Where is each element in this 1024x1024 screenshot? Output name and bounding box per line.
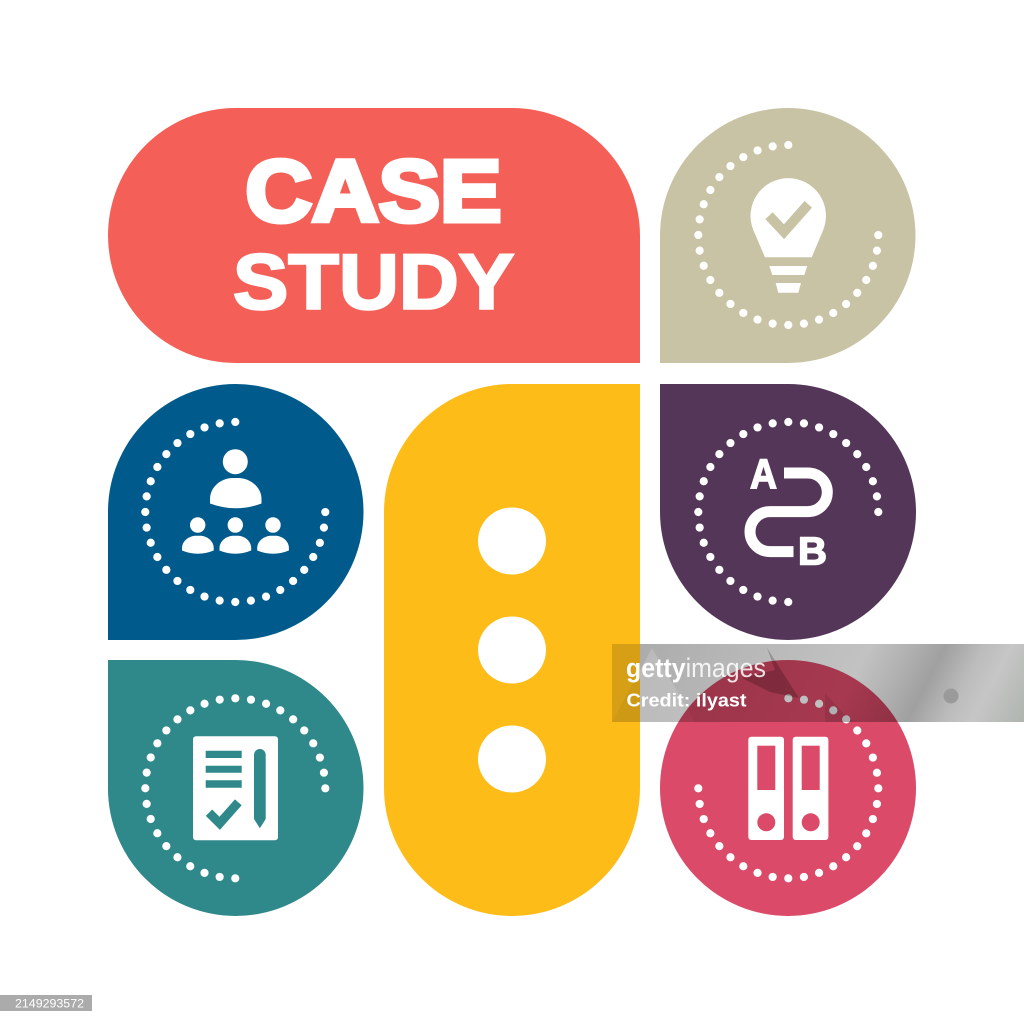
watermark band [612,644,1024,722]
heading: case: CASE [246,143,502,240]
icon: a to b path [750,450,827,573]
panel: idea lamp [660,108,916,363]
panel: document [108,660,364,916]
icon: a to b path: B [798,530,827,573]
icon: light bulb with check [751,178,826,293]
panel: route [660,384,916,640]
dotted ring: binders [698,698,878,878]
icon: team hierarchy [182,449,289,554]
watermark credit: Credit: ilyast [626,690,746,711]
panel: title [108,108,640,363]
image id tag: 2149293572 [15,996,84,1010]
panel: team [108,384,364,640]
dotted ring: document [145,698,325,878]
image id tag [0,995,92,1011]
dotted ring: lamp [698,145,878,325]
icon: a to b path: A [750,450,777,498]
dotted ring: team [145,422,325,602]
heading: study: STUDY [233,238,514,326]
panel: central yellow pill [384,384,640,916]
watermark logo: gettyimages [626,653,766,683]
three white dots [478,508,546,792]
dotted ring: route [698,422,878,602]
icon: two binders [748,737,828,840]
icon: checklist with pencil [193,736,278,840]
panel: binders [660,660,916,916]
